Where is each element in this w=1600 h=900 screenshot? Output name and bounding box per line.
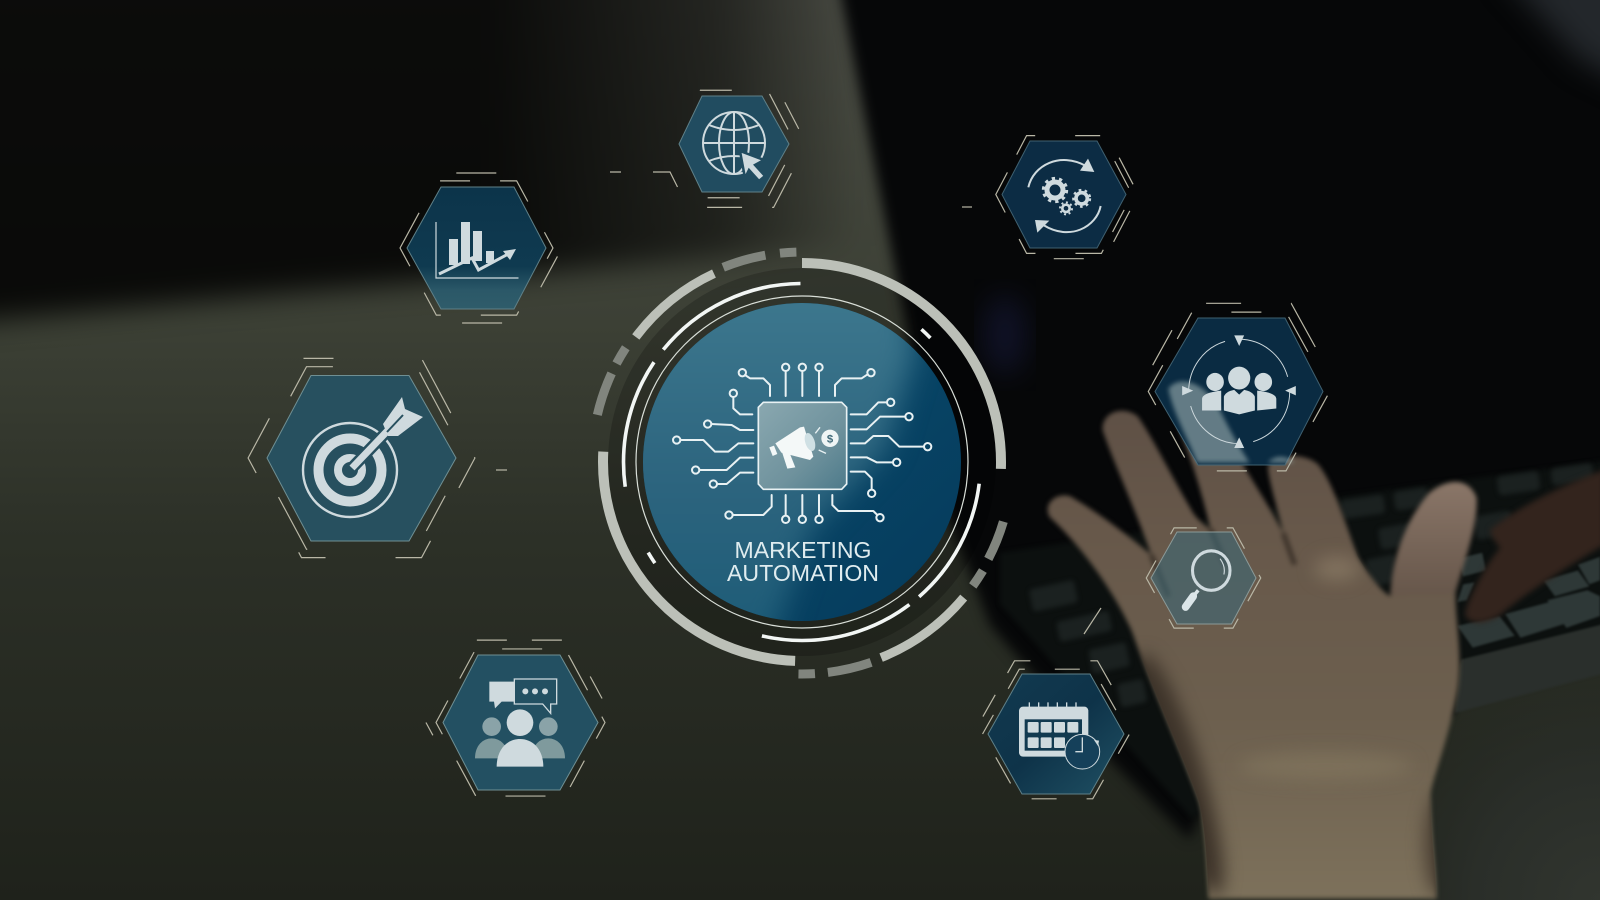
inner white arc ring	[624, 284, 980, 640]
icon: group with speech bubbles	[475, 679, 565, 767]
hexagon: team	[1138, 303, 1340, 480]
photo background: monitor glare	[1500, 0, 1600, 90]
icon: globe with cursor	[703, 112, 765, 181]
photo background: bottom right desk	[1370, 670, 1600, 900]
finger seen through hexagon	[1168, 381, 1295, 463]
hexagon: analytics chart	[391, 173, 562, 323]
outer segmented ring	[590, 250, 1014, 674]
hexagon: process gears	[962, 130, 1138, 259]
hexagon: calendar schedule	[973, 661, 1139, 807]
connector stroke	[1084, 608, 1101, 634]
icon: rotating gears	[1028, 159, 1101, 233]
decorative bracket	[426, 640, 615, 805]
photo background: black monitor area	[838, 0, 1600, 840]
hexagon: search	[1084, 528, 1261, 634]
hub title: MARKETING	[734, 537, 872, 563]
icon: magnifying glass	[1186, 551, 1230, 607]
icon: calendar with clock	[1019, 702, 1100, 769]
chip with circuit traces	[673, 364, 931, 523]
photo background: dark upper left wall	[0, 0, 860, 325]
photo background: keyboard	[1000, 460, 1600, 818]
decorative bracket	[391, 173, 562, 323]
hexagon: target goal	[248, 358, 507, 558]
icon: target with arrow	[303, 397, 423, 517]
connector dash	[962, 206, 972, 208]
keyboard front bezel	[1455, 622, 1600, 713]
icon: team in circular arrows	[1168, 335, 1296, 463]
hexagon: customer conversation	[426, 640, 615, 805]
coin icon	[815, 427, 839, 453]
decorative bracket	[990, 130, 1138, 259]
icon: bar chart with arrow	[436, 222, 518, 278]
decorative bracket	[1146, 528, 1261, 628]
photo background: reflection blob	[983, 295, 1027, 375]
blue disc	[643, 303, 961, 621]
decorative bracket	[248, 358, 475, 558]
connector dashes	[610, 172, 678, 187]
photo background: main hand	[1048, 378, 1477, 900]
central marketing automation hub	[590, 250, 1014, 674]
decorative bracket	[1138, 303, 1340, 480]
connector dash: target	[496, 469, 507, 471]
photo background: other hand fingers	[1465, 470, 1600, 622]
coin icon: $	[827, 433, 834, 445]
thin ring	[636, 296, 968, 628]
chip body	[758, 402, 847, 489]
circuit traces	[673, 364, 931, 523]
hexagon: globe web	[610, 81, 807, 207]
hub title	[727, 537, 879, 586]
decorative bracket	[973, 661, 1139, 807]
megaphone icon	[769, 427, 817, 469]
hand shading	[1142, 554, 1436, 897]
hub title: AUTOMATION	[727, 560, 879, 586]
decorative bracket	[661, 81, 807, 207]
